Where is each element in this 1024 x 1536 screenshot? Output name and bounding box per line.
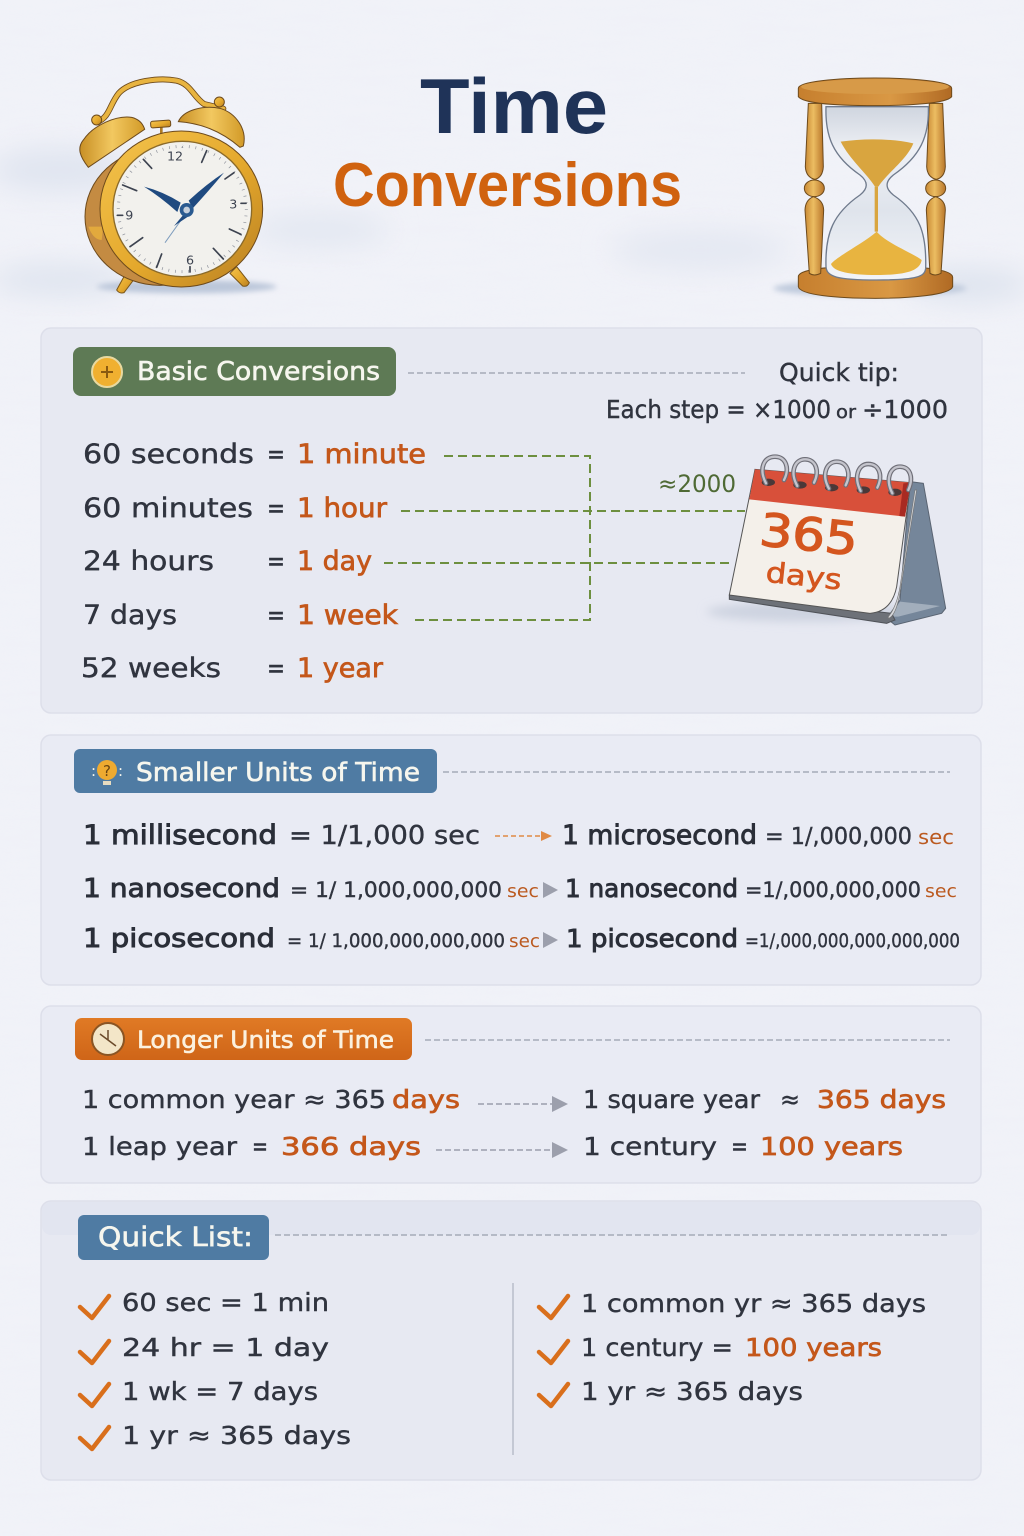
row: common and square year: days [392, 1085, 460, 1114]
row: common and square year: 1 square year [583, 1085, 761, 1114]
illustration: calendar: days [764, 556, 843, 597]
heading: longer units: Longer Units of Time [137, 1026, 394, 1054]
row: nanosecond: 1 nanosecond [83, 874, 280, 904]
row: picosecond: =1/,000,000,000,000,000 [745, 930, 960, 952]
panel: smaller units of time [41, 735, 981, 985]
row: nanosecond: 1 nanosecond [565, 874, 738, 903]
conversion rows: = [267, 439, 285, 470]
row: millisecond and microsecond: = 1/,000,000 [765, 824, 912, 850]
quick tip: Quick tip: [779, 358, 899, 387]
conversion rows: 7 days [83, 600, 177, 631]
row: leap year and century: 1 century [583, 1132, 717, 1161]
illustration: alarm clock [80, 79, 277, 293]
row: leap year and century: = [731, 1132, 748, 1161]
row: millisecond and microsecond: 1 millisecond [83, 820, 277, 851]
conversion rows: 1 week [297, 600, 398, 631]
quick tip: ÷1000 [862, 395, 948, 424]
row: leap year and century: 1 leap year [82, 1132, 238, 1161]
list: right column: 100 years [745, 1333, 882, 1362]
list: left column: 24 hr = 1 day [122, 1333, 329, 1362]
row: leap year and century [82, 1132, 903, 1161]
conversion rows: = [267, 653, 285, 684]
heading: quick list [78, 1215, 269, 1260]
row: leap year and century: = [252, 1132, 268, 1161]
row: common and square year: 365 days [817, 1085, 946, 1114]
heading: smaller units: ? [103, 762, 111, 780]
conversion rows: 1 hour [297, 493, 388, 524]
title: Time [420, 62, 608, 150]
row: picosecond: 1 picosecond [83, 924, 275, 954]
conversion rows [81, 439, 426, 684]
quick tip [606, 358, 948, 424]
conversion rows: = [267, 493, 285, 524]
list: left column: 1 yr ≈ 365 days [122, 1421, 351, 1450]
illustration: calendar: 365 [757, 503, 861, 566]
title: Conversions [333, 151, 682, 220]
list: left column: 1 wk = 7 days [122, 1377, 318, 1406]
row: nanosecond: = 1/ 1,000,000,000 [290, 878, 502, 902]
row: nanosecond [83, 874, 957, 904]
row: picosecond: 1 picosecond [566, 924, 738, 953]
row: millisecond and microsecond: sec [918, 825, 954, 849]
conversion rows: 1 day [297, 546, 372, 577]
list: left column [80, 1288, 351, 1450]
row: picosecond [83, 924, 960, 954]
list: right column: 1 century = [581, 1333, 733, 1362]
row: nanosecond: sec [925, 881, 957, 902]
heading: smaller units [74, 749, 437, 793]
panel: quick list [41, 1201, 981, 1480]
title [333, 62, 682, 220]
connector lines [384, 456, 745, 620]
row: millisecond and microsecond: = 1/1,000 sec [289, 821, 480, 851]
quick tip: or [836, 402, 857, 423]
conversion rows: 24 hours [83, 546, 214, 577]
conversion rows: 60 minutes [83, 493, 253, 524]
list: right column: 1 common yr ≈ 365 days [581, 1289, 926, 1318]
list: left column: 60 sec = 1 min [122, 1288, 329, 1317]
heading: quick list: Quick List: [98, 1222, 253, 1253]
conversion rows: 60 seconds [83, 439, 254, 470]
panel: longer units of time [41, 1006, 981, 1183]
heading: smaller units: : [118, 762, 123, 780]
illustration: hourglass [773, 78, 967, 298]
row: common and square year [82, 1085, 946, 1114]
row: picosecond: sec [509, 931, 540, 952]
row: millisecond and microsecond [83, 820, 954, 851]
illustration: alarm clock: 3 [229, 197, 237, 212]
heading: basic conversions [73, 347, 396, 396]
row: leap year and century: 366 days [281, 1132, 421, 1161]
row: nanosecond: sec [507, 881, 539, 902]
conversion rows: = [267, 546, 285, 577]
row: common and square year: 1 common year ≈ 365 [82, 1085, 386, 1114]
heading: longer units [75, 1018, 412, 1060]
row: picosecond: = 1/ 1,000,000,000,000 [287, 930, 505, 952]
panel: basic conversions [41, 328, 982, 713]
heading: basic conversions: Basic Conversions [137, 357, 380, 387]
row: leap year and century: 100 years [760, 1132, 903, 1161]
approx 2000 label: ≈2000 [658, 470, 736, 498]
heading: smaller units: : [91, 762, 96, 780]
list: right column [539, 1289, 926, 1406]
conversion rows: 1 minute [297, 439, 426, 470]
row: nanosecond: =1/,000,000,000 [745, 878, 921, 902]
heading: smaller units: Smaller Units of Time [136, 758, 420, 788]
conversion rows: 52 weeks [81, 653, 221, 684]
illustration: calendar [707, 457, 946, 625]
conversion rows: = [267, 600, 285, 631]
row: millisecond and microsecond: 1 microsecond [562, 820, 757, 851]
row: common and square year: ≈ [780, 1085, 800, 1114]
illustration: alarm clock: 6 [186, 253, 194, 268]
list: right column: 1 yr ≈ 365 days [581, 1377, 803, 1406]
illustration: alarm clock: 9 [125, 207, 133, 222]
illustration: alarm clock: 12 [167, 149, 183, 164]
quick tip: Each step = ×1000 [606, 395, 831, 424]
conversion rows: 1 year [297, 653, 384, 684]
